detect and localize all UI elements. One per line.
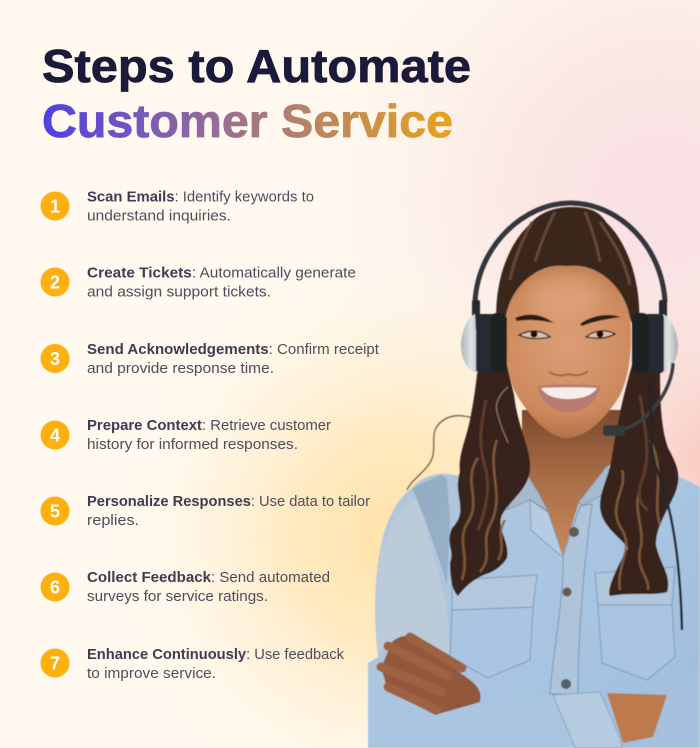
step 5 [40,493,370,529]
pocket left [450,607,533,678]
nose [549,371,588,375]
step 1: 1 [50,196,60,216]
thin left cable [496,387,508,443]
step 7: to improve service. [87,665,216,682]
step 3: Send Acknowledgements: Confirm receipt [87,341,380,358]
step 1: understand inquiries. [87,208,231,224]
step 5: Personalize Responses: Use data to tailor [87,493,370,510]
step 7 [40,646,344,682]
step 4: 4 [50,426,60,446]
collar right [578,466,614,505]
step 4: history for informed responses. [87,436,298,453]
step 7: Enhance Continuously: Use feedback [87,646,344,663]
step 5: 5 [50,502,60,522]
step 4 [40,417,331,453]
hair top [496,207,639,345]
step 2: Create Tickets: Automatically generate [87,264,356,282]
right lock [600,365,678,596]
right forearm [607,693,667,743]
step 6: 6 [50,578,60,598]
step 1: Scan Emails: Identify keywords to [87,188,314,206]
neck [522,410,622,556]
title: Customer Service [42,95,453,147]
folded sleeve [368,663,622,748]
pocket right [598,605,675,680]
headset [461,203,682,630]
microphone boom [625,363,673,429]
title: Steps to Automate [42,40,471,92]
hand [381,636,481,716]
cable [650,377,682,630]
placket [550,504,592,694]
step 5: replies. [87,512,139,529]
step 3 [40,341,380,377]
title [42,40,471,147]
woman with headset [368,203,700,748]
crossed arms [368,636,700,748]
sleeve highlight [377,498,450,655]
step 1 [40,188,314,224]
step 6: surveys for service ratings. [87,588,268,605]
mouth [537,384,601,412]
microphone [603,425,625,436]
eyebrows [515,315,554,323]
step 2 [40,264,356,300]
long hair [449,365,678,596]
stray hair [407,416,474,490]
step 3: and provide response time. [87,360,274,377]
collar left [507,468,548,511]
step 6 [40,569,330,605]
step 2: 2 [50,272,60,292]
step list [40,188,380,682]
right ear cup [632,300,678,373]
step 4: Prepare Context: Retrieve customer [87,417,331,434]
headband [475,203,665,302]
denim shirt [368,466,700,748]
highlight [529,278,601,318]
left lock [449,365,530,596]
shoulder seam [412,475,450,585]
hair highlights [462,440,660,590]
face [504,265,631,438]
step 7: 7 [50,654,60,674]
buttons [562,528,578,688]
right sleeve [625,667,700,748]
left ear cup [461,300,507,373]
step 2: and assign support tickets. [87,284,271,300]
step 3: 3 [50,349,60,369]
eyes [519,331,550,339]
step 6: Collect Feedback: Send automated [87,569,330,586]
cuff [553,692,622,748]
